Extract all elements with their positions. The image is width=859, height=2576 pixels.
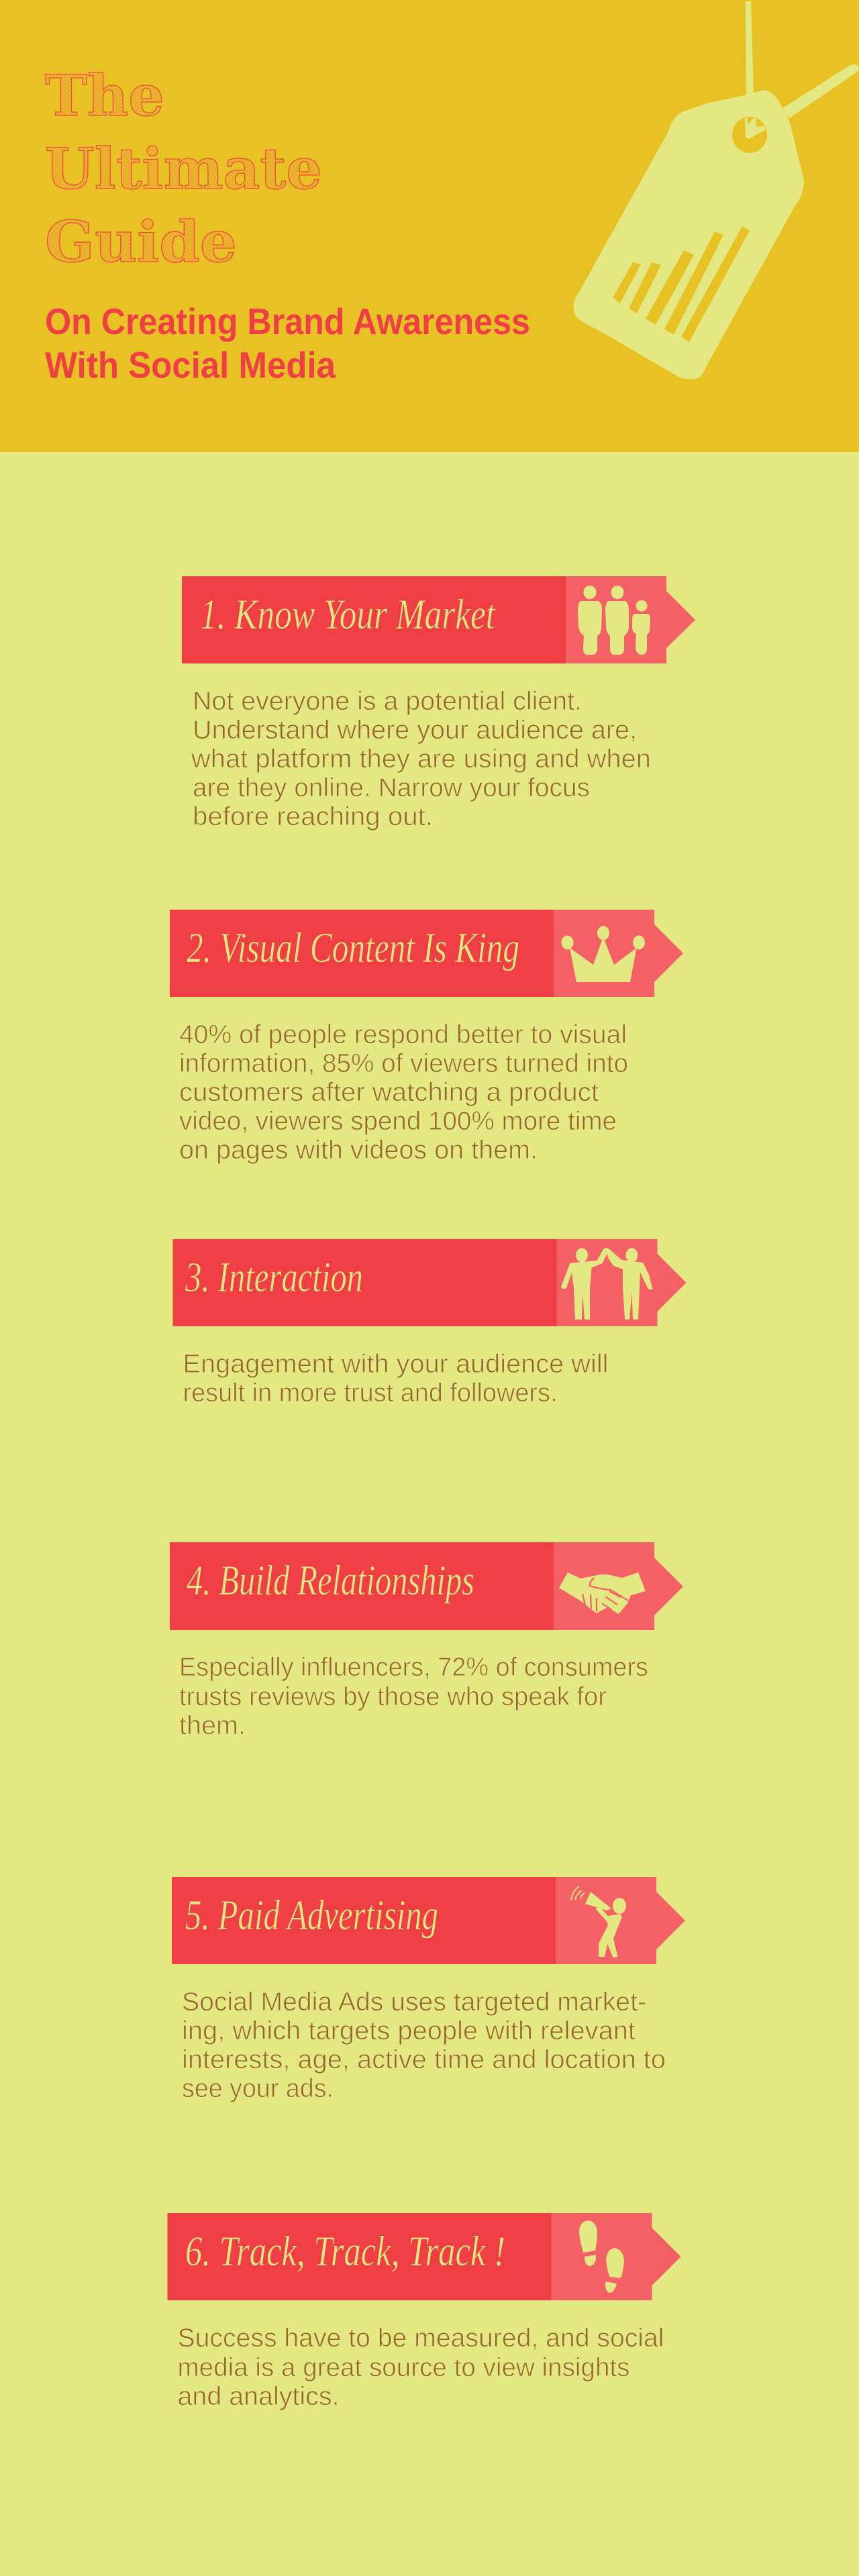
banner 4: 4. Build Relationships: [187, 1556, 474, 1604]
banner 4: [170, 1542, 683, 1630]
icon: footprints: [579, 2220, 624, 2293]
text block 3: [183, 1350, 608, 1407]
panel: step 5 paid advertising: [172, 1877, 685, 2103]
text block 2: [179, 1020, 628, 1165]
icon: crown: [562, 926, 645, 982]
title: Ultimate: [45, 136, 322, 202]
text block 6: [177, 2324, 664, 2411]
text block 5: Social Media Ads uses targeted market-: [182, 1988, 646, 2017]
subtitle: [45, 301, 530, 386]
icon: person with megaphone: [571, 1886, 626, 1957]
text block 3: Engagement with your audience will: [183, 1350, 608, 1379]
text block 2: 40% of people respond better to visual: [179, 1020, 627, 1049]
title: The: [45, 62, 164, 129]
banner 5: [172, 1877, 685, 1964]
text block 6: and analytics.: [177, 2382, 340, 2411]
text block 1: before reaching out.: [193, 802, 433, 831]
text block 2: customers after watching a product: [179, 1078, 599, 1107]
text block 2: information, 85% of viewers turned into: [179, 1049, 628, 1078]
panel: header: [0, 0, 859, 452]
icon: people: [578, 586, 650, 655]
panel: step 4 build relationships: [170, 1542, 683, 1740]
icon: handshake: [559, 1572, 646, 1614]
banner 6: 6. Track, Track, Track !: [185, 2227, 505, 2275]
text block 1: [191, 687, 651, 831]
panel: step 2 visual content is king: [170, 910, 683, 1165]
text block 3: result in more trust and followers.: [183, 1379, 557, 1407]
text block 2: on pages with videos on them.: [179, 1136, 538, 1165]
banner 2: 2. Visual Content Is King: [187, 924, 519, 971]
text block 5: see your ads.: [182, 2074, 334, 2103]
banner 2: [170, 910, 683, 997]
text block 1: Understand where your audience are,: [193, 716, 637, 745]
banner 3: 3. Interaction: [185, 1253, 363, 1301]
panel: step 1 know your market: [182, 576, 695, 831]
title: Guide: [45, 209, 237, 275]
title: [45, 62, 322, 275]
icon: high five: [561, 1248, 653, 1320]
banner 1: 1. Know Your Market: [200, 590, 497, 638]
banner 3: [173, 1239, 686, 1326]
text block 6: media is a great source to view insights: [177, 2353, 629, 2382]
text block 1: Not everyone is a potential client.: [193, 687, 582, 716]
text block 1: are they online. Narrow your focus: [193, 773, 590, 802]
text block 4: trusts reviews by those who speak for: [179, 1682, 607, 1711]
text block 6: Success have to be measured, and social: [177, 2324, 664, 2353]
panel: step 6 track track track: [168, 2213, 680, 2411]
text block 1: what platform they are using and when: [191, 745, 651, 773]
text block 5: ing, which targets people with relevant: [182, 2017, 636, 2045]
text block 5: interests, age, active time and location to: [182, 2045, 666, 2074]
text block 2: video, viewers spend 100% more time: [179, 1107, 617, 1136]
banner 5: 5. Paid Advertising: [185, 1891, 438, 1939]
text block 4: [179, 1653, 648, 1740]
banner 1: [182, 576, 695, 663]
text block 5: [182, 1988, 666, 2103]
icon: price tag with bar chart: [573, 1, 859, 379]
text block 4: them.: [179, 1711, 246, 1740]
text block 4: Especially influencers, 72% of consumers: [179, 1653, 648, 1682]
panel: step 3 interaction: [173, 1239, 686, 1407]
subtitle: With Social Media: [45, 344, 336, 386]
subtitle: On Creating Brand Awareness: [45, 301, 530, 342]
banner 6: [168, 2213, 680, 2300]
